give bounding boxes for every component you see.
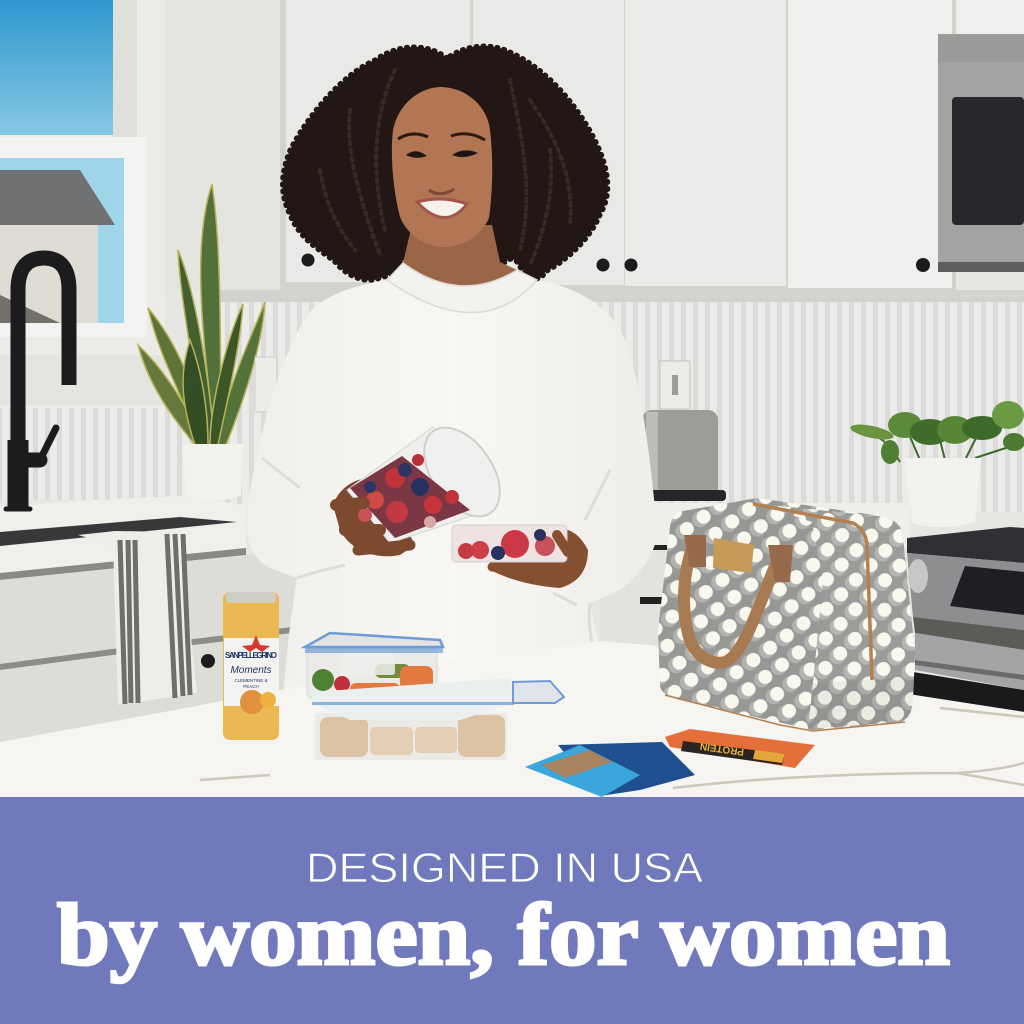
- snake plant: [138, 184, 265, 445]
- white pot: [904, 458, 981, 527]
- base shading: [808, 677, 915, 729]
- lower cabinets: [0, 545, 667, 742]
- subheading: DESIGNED IN USA: [306, 844, 703, 891]
- smile: [417, 199, 467, 218]
- green leafy plant: [849, 401, 1024, 464]
- microwave: [938, 34, 1024, 272]
- handles: [684, 540, 781, 663]
- sweater folds: [262, 458, 610, 645]
- food container: vegetables: [305, 633, 443, 698]
- white plant pot: [182, 444, 243, 500]
- marble island counter: [0, 641, 1024, 797]
- side panel: [760, 504, 915, 729]
- headline: by women, for women: [57, 887, 950, 984]
- power outlets: [255, 357, 690, 412]
- hair curls: [320, 70, 571, 265]
- lunch bag: [658, 498, 915, 731]
- neck: [403, 225, 517, 287]
- sweater: [247, 280, 657, 695]
- container: berries cup: [347, 414, 515, 543]
- upper cabinets: [280, 0, 1024, 292]
- can: sparkling drink: SANPELLEGRINO: [225, 651, 277, 660]
- can: sparkling drink: CLEMENTINE &: [234, 678, 268, 683]
- food container: wraps: [312, 678, 564, 760]
- kitchen background wall: [0, 0, 1024, 800]
- zipper trim: [753, 504, 872, 680]
- bag bottom trim: [665, 695, 905, 731]
- hair fuzz: [282, 46, 608, 280]
- right hand fingers: [492, 535, 568, 570]
- toaster: [642, 410, 726, 501]
- brand tag: [713, 538, 754, 573]
- dish towel: [78, 531, 197, 705]
- left hand fingers: [336, 503, 410, 550]
- can: sparkling drink: [223, 592, 279, 740]
- snack packs: [525, 742, 695, 797]
- woman: [247, 46, 657, 695]
- eyes and brows: [398, 134, 485, 194]
- handle tabs: [684, 535, 793, 582]
- sweater collar: [387, 263, 537, 312]
- can: sparkling drink: PEACH: [243, 684, 259, 689]
- protein bar: PROTEIN: [699, 740, 745, 757]
- window: [0, 0, 165, 408]
- right hand: [490, 529, 588, 588]
- banner: [0, 797, 1024, 1024]
- black faucet: [6, 258, 69, 509]
- back counter and sink: [0, 496, 910, 580]
- hair overlap: [478, 85, 506, 140]
- protein bar: [665, 729, 815, 768]
- container: berries tray: [452, 525, 567, 562]
- face: [392, 87, 492, 247]
- stove: [907, 527, 1024, 712]
- can: sparkling drink: Moments: [230, 665, 272, 676]
- left hand: [333, 477, 415, 556]
